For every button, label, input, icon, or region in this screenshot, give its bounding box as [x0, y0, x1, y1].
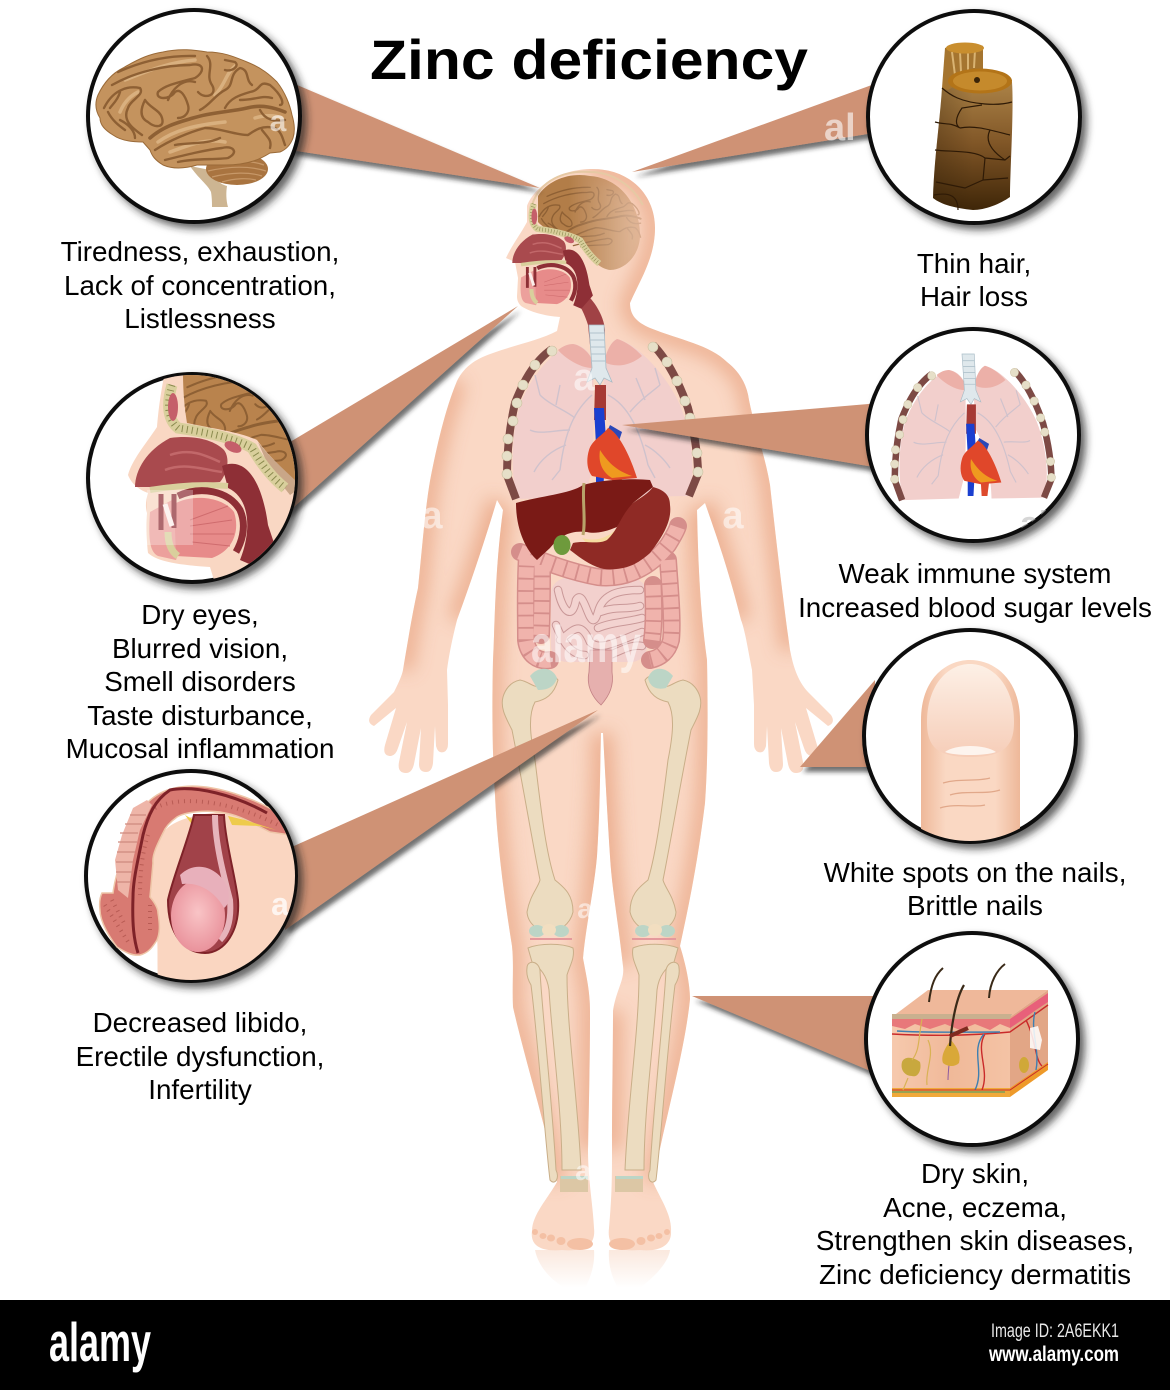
cerebellum	[206, 158, 268, 185]
text: immune symptoms: Weak immune system	[839, 558, 1111, 589]
dermis	[892, 1019, 1010, 1089]
panel: nose and mouth circle	[88, 372, 329, 590]
hair cross-section top	[946, 42, 984, 54]
text: nail symptoms	[824, 857, 1126, 921]
text: nose and eye symptoms: Dry eyes,	[141, 599, 259, 630]
watermark glyphs: a	[577, 893, 593, 924]
panel: brain circle	[88, 10, 300, 222]
text: brain symptoms	[61, 236, 339, 334]
watermark glyphs: a	[722, 495, 744, 537]
text: nose and eye symptoms	[66, 599, 334, 764]
text: skin symptoms	[816, 1158, 1134, 1290]
brain inside the head	[538, 175, 641, 270]
text: reproductive symptoms	[76, 1007, 324, 1105]
large intestine	[520, 526, 678, 660]
panel: hair circle	[868, 11, 1080, 223]
cerebrum	[96, 50, 294, 168]
nasal and oral cross-section	[512, 204, 599, 309]
text: skin symptoms: Zinc deficiency dermatitis	[819, 1259, 1131, 1290]
text: hair symptoms: Thin hair,	[917, 248, 1031, 279]
watermark glyphs	[421, 357, 744, 1186]
testis	[171, 880, 225, 952]
lunula	[945, 746, 996, 755]
watermark on hair pointer: al	[824, 107, 856, 149]
text: brain symptoms: Tiredness, exhaustion,	[61, 236, 339, 267]
brain stem	[190, 166, 228, 207]
lungs, trachea and heart	[502, 325, 703, 499]
face skin	[128, 375, 295, 579]
spermatic cord	[215, 815, 230, 940]
urethra	[133, 789, 267, 953]
pointer: nails	[800, 680, 875, 767]
panel: lungs circle	[867, 329, 1079, 543]
text: hair symptoms	[917, 248, 1031, 312]
hair follicle	[948, 1040, 951, 1080]
blood vessels	[892, 1005, 1048, 1090]
text: nail symptoms: Brittle nails	[907, 890, 1043, 921]
corpus spongiosum	[115, 800, 152, 898]
text: hair symptoms: Hair loss	[920, 281, 1028, 312]
text: nose and eye symptoms: Mucosal inflammation	[66, 733, 334, 764]
body silhouette	[360, 160, 850, 1260]
penis and urethra	[100, 786, 290, 955]
text: nail symptoms: White spots on the nails,	[824, 857, 1126, 888]
watermark glyphs: a	[573, 357, 595, 399]
title: Zinc deficiency	[370, 28, 808, 91]
knee and hip cartilage	[529, 669, 675, 1179]
watermark: al	[1020, 505, 1048, 543]
fingernail	[927, 664, 1014, 757]
text: skin symptoms: Acne, eczema,	[883, 1192, 1067, 1223]
text: brain symptoms: Lack of concentration,	[64, 270, 336, 301]
text: reproductive symptoms: Decreased libido,	[93, 1007, 307, 1038]
small intestine	[551, 578, 647, 662]
hair shaft	[933, 80, 1013, 210]
pointer: lungs	[622, 403, 880, 468]
scrotum	[168, 815, 238, 953]
text: immune symptoms: Increased blood sugar levels	[798, 592, 1152, 623]
text: immune symptoms	[798, 558, 1152, 623]
text: nose and eye symptoms: Blurred vision,	[112, 633, 288, 664]
hair stump	[942, 44, 983, 90]
rectum	[588, 650, 613, 705]
watermark	[1030, 1026, 1042, 1050]
pointer: skin	[692, 996, 880, 1075]
pointer: nose	[285, 306, 518, 515]
gallbladder	[554, 535, 570, 555]
footer logo: alamy	[49, 1311, 151, 1373]
skull line	[532, 172, 643, 205]
side gland	[1019, 1057, 1029, 1073]
finger	[921, 660, 1020, 850]
panel: nail circle	[864, 630, 1076, 850]
stomach	[570, 487, 670, 569]
text: skin symptoms: Dry skin,	[921, 1158, 1029, 1189]
epidermis	[892, 1019, 1010, 1030]
pointer: hair	[632, 82, 880, 172]
sweat gland	[902, 1058, 921, 1076]
panel: skin circle	[866, 933, 1078, 1145]
right leg bones	[615, 676, 701, 1192]
text: nose and eye symptoms: Smell disorders	[104, 666, 296, 697]
text: brain symptoms: Listlessness	[124, 303, 276, 334]
pancreas	[582, 529, 616, 547]
lungs and heart	[891, 354, 1055, 500]
left leg bones	[502, 676, 588, 1192]
liver	[516, 479, 653, 560]
toes	[532, 1229, 670, 1250]
text: nose and eye symptoms: Taste disturbance,	[87, 700, 313, 731]
falciform ligament	[583, 483, 584, 535]
pointer: testicle	[285, 710, 598, 930]
anatomical cross-section	[135, 385, 285, 566]
fat layer	[892, 1088, 1010, 1097]
floor reflection of feet	[535, 1250, 670, 1288]
watermark glyphs: a	[421, 495, 443, 537]
skin surface	[892, 990, 1048, 1017]
text: skin symptoms: Strengthen skin diseases,	[816, 1225, 1134, 1256]
watermark glyphs: a	[575, 1155, 591, 1186]
footer bar	[0, 1300, 1170, 1390]
text: reproductive symptoms: Erectile dysfunction,	[76, 1041, 324, 1072]
other hairs	[929, 964, 1005, 1002]
watermark: a	[271, 886, 289, 922]
panel: testicle circle	[86, 771, 300, 990]
thigh skin	[150, 812, 300, 990]
epididymis	[180, 867, 229, 908]
footer url: www.alamy.com	[988, 1343, 1119, 1366]
scrotal fat	[185, 815, 276, 830]
wrinkles	[940, 778, 1000, 808]
throat	[576, 290, 605, 345]
pointer: brain	[290, 82, 540, 188]
watermark glyphs: alamy	[531, 616, 641, 674]
human body figure	[360, 160, 850, 1288]
brain tissue	[183, 375, 295, 481]
hair cuticle cracks	[934, 88, 1012, 210]
watermark: a	[270, 105, 287, 138]
footer image id: Image ID: 2A6EKK1	[991, 1321, 1119, 1342]
text: reproductive symptoms: Infertility	[148, 1074, 252, 1105]
side face	[1010, 990, 1048, 1092]
